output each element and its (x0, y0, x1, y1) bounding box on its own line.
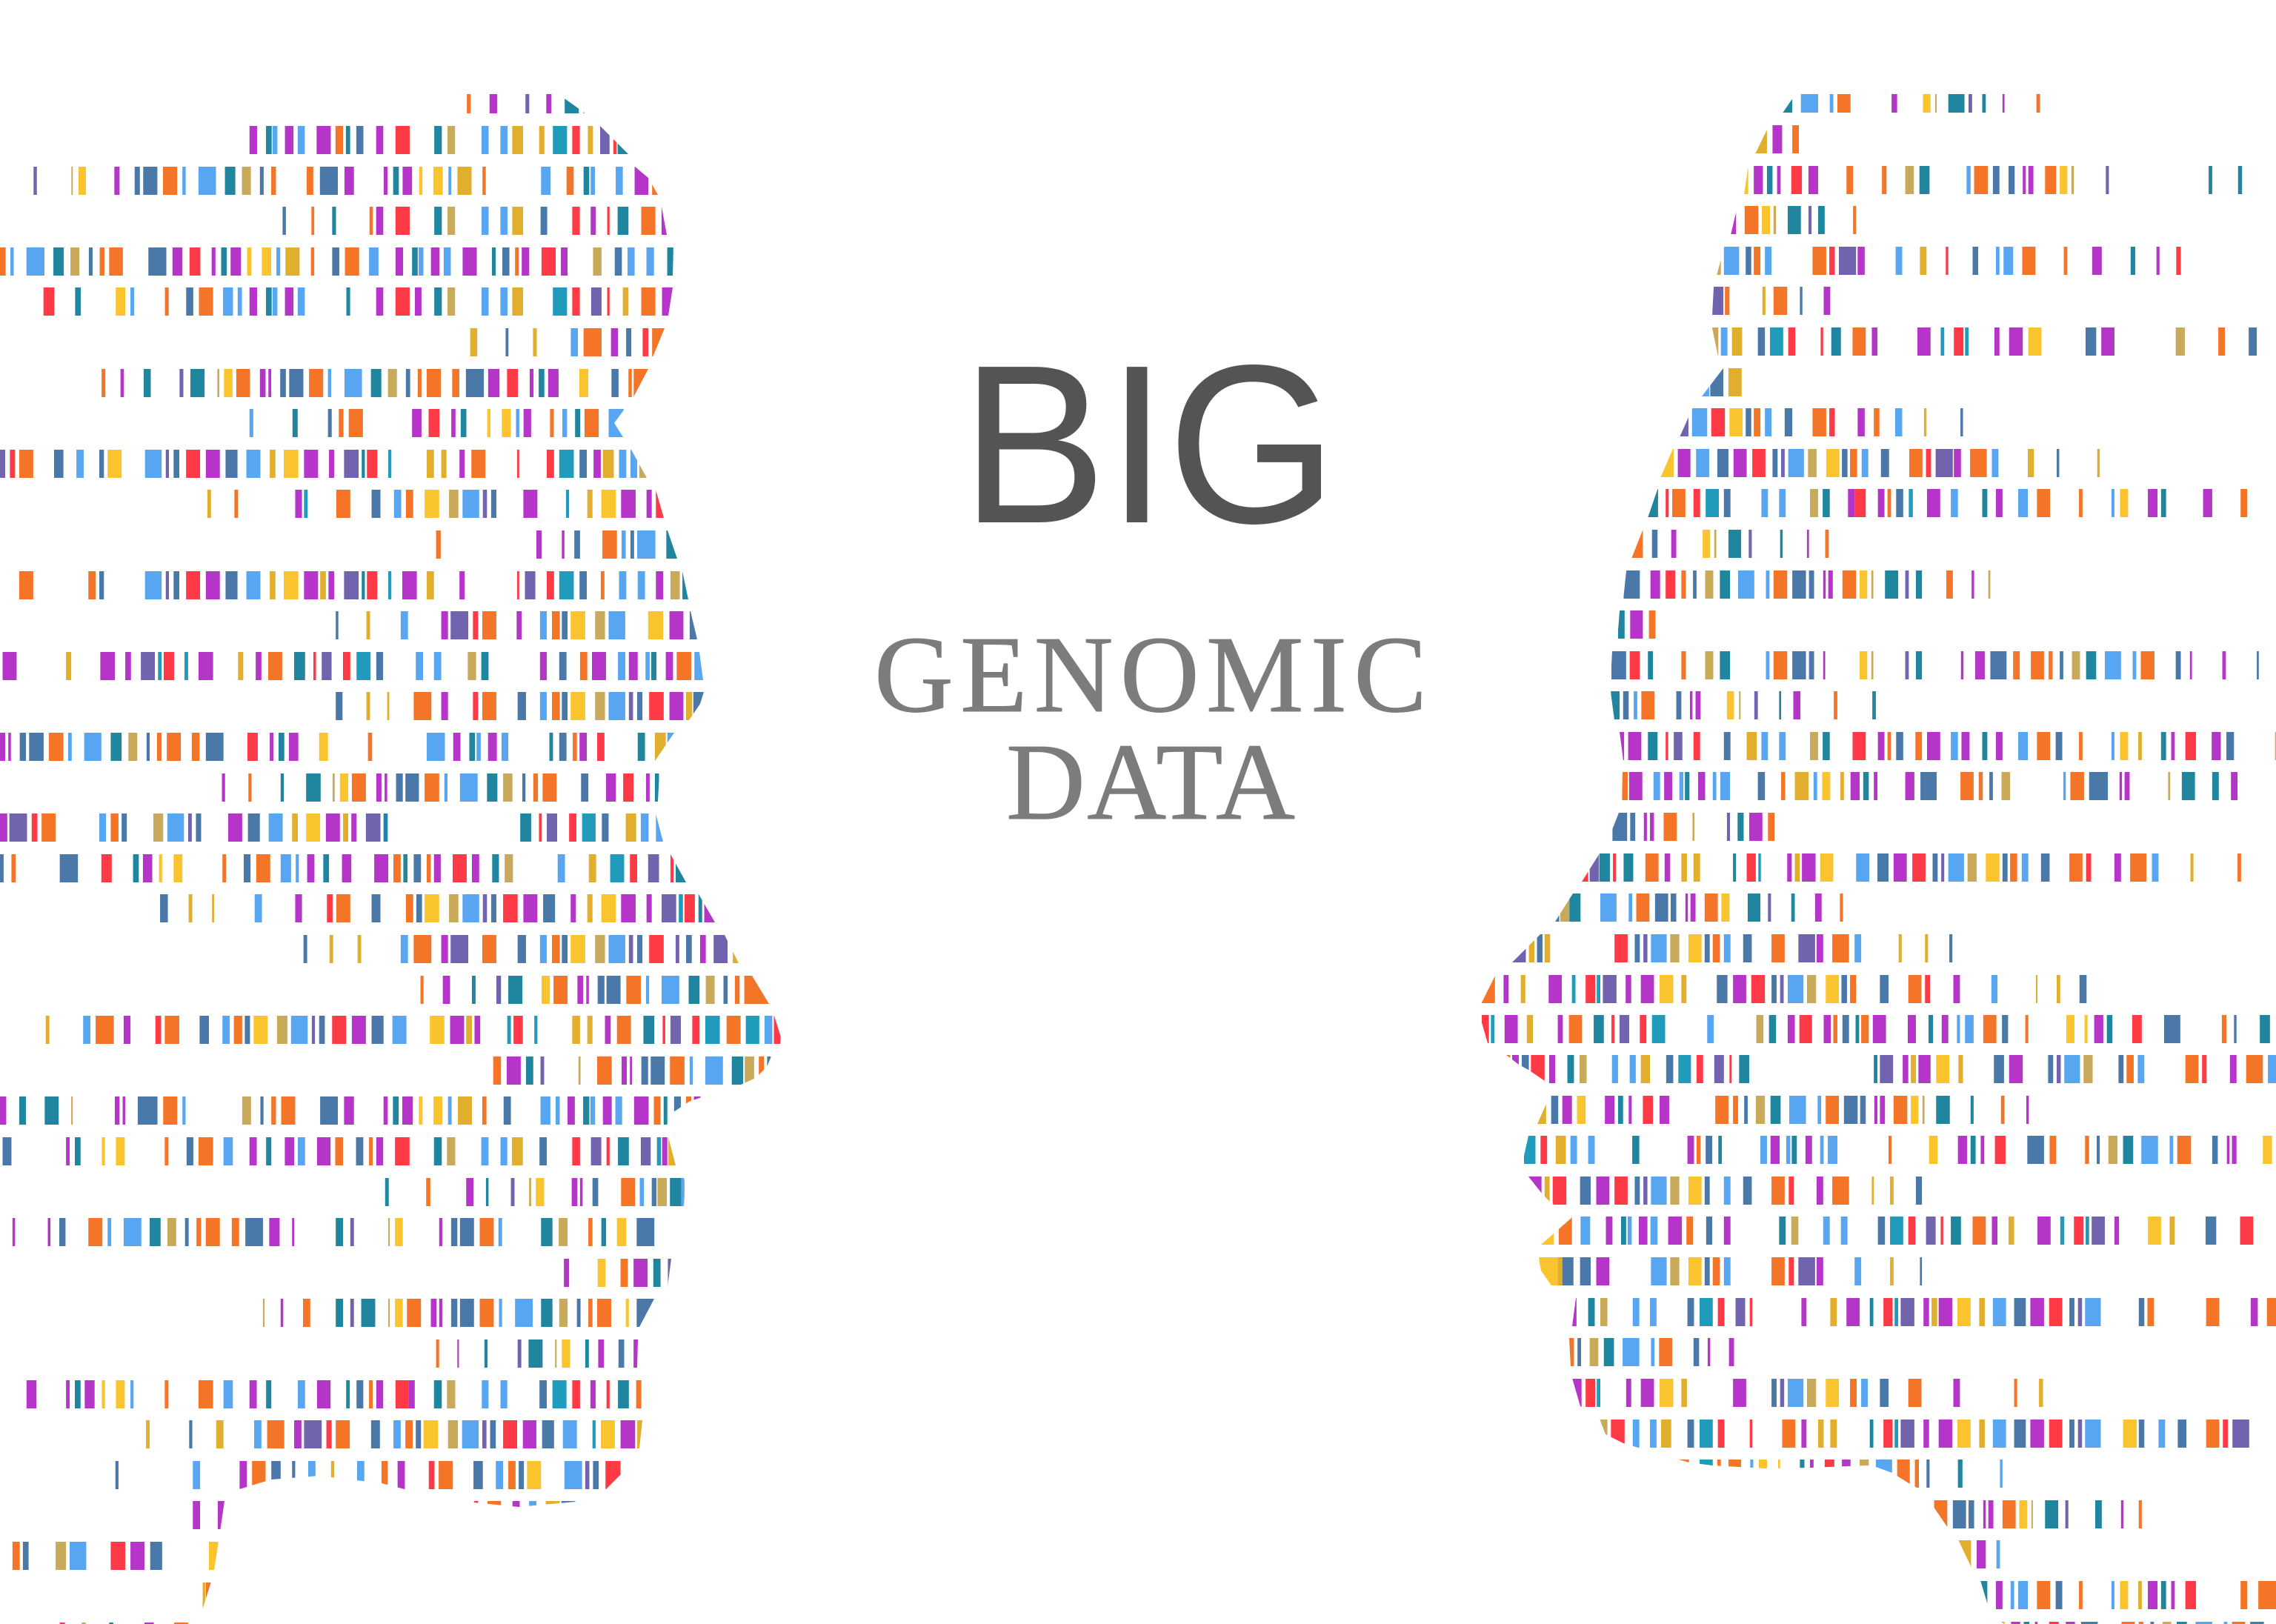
sequence bands: chin and neck (1569, 1312, 2276, 1624)
sequence bands: brow and eye (1581, 503, 2276, 868)
title: BIG: BIG (961, 318, 1337, 570)
sequence bands: crown and forehead (1660, 99, 2257, 463)
sequence bands: brow and eye (0, 464, 715, 908)
sequence bands: chin and neck (13, 1313, 654, 1624)
sequence bands: nose and mouth (0, 949, 781, 1273)
subtitle line: GENOMIC: GENOMIC (874, 614, 1427, 736)
panel: left head silhouette of sequence bands (0, 99, 781, 1624)
sequence bands: nose and mouth (1482, 908, 2276, 1271)
subtitle line: DATA: DATA (1006, 722, 1295, 843)
panel: right head silhouette of sequence bands (1482, 99, 2276, 1624)
sequence bands: crown and forehead (0, 99, 673, 423)
